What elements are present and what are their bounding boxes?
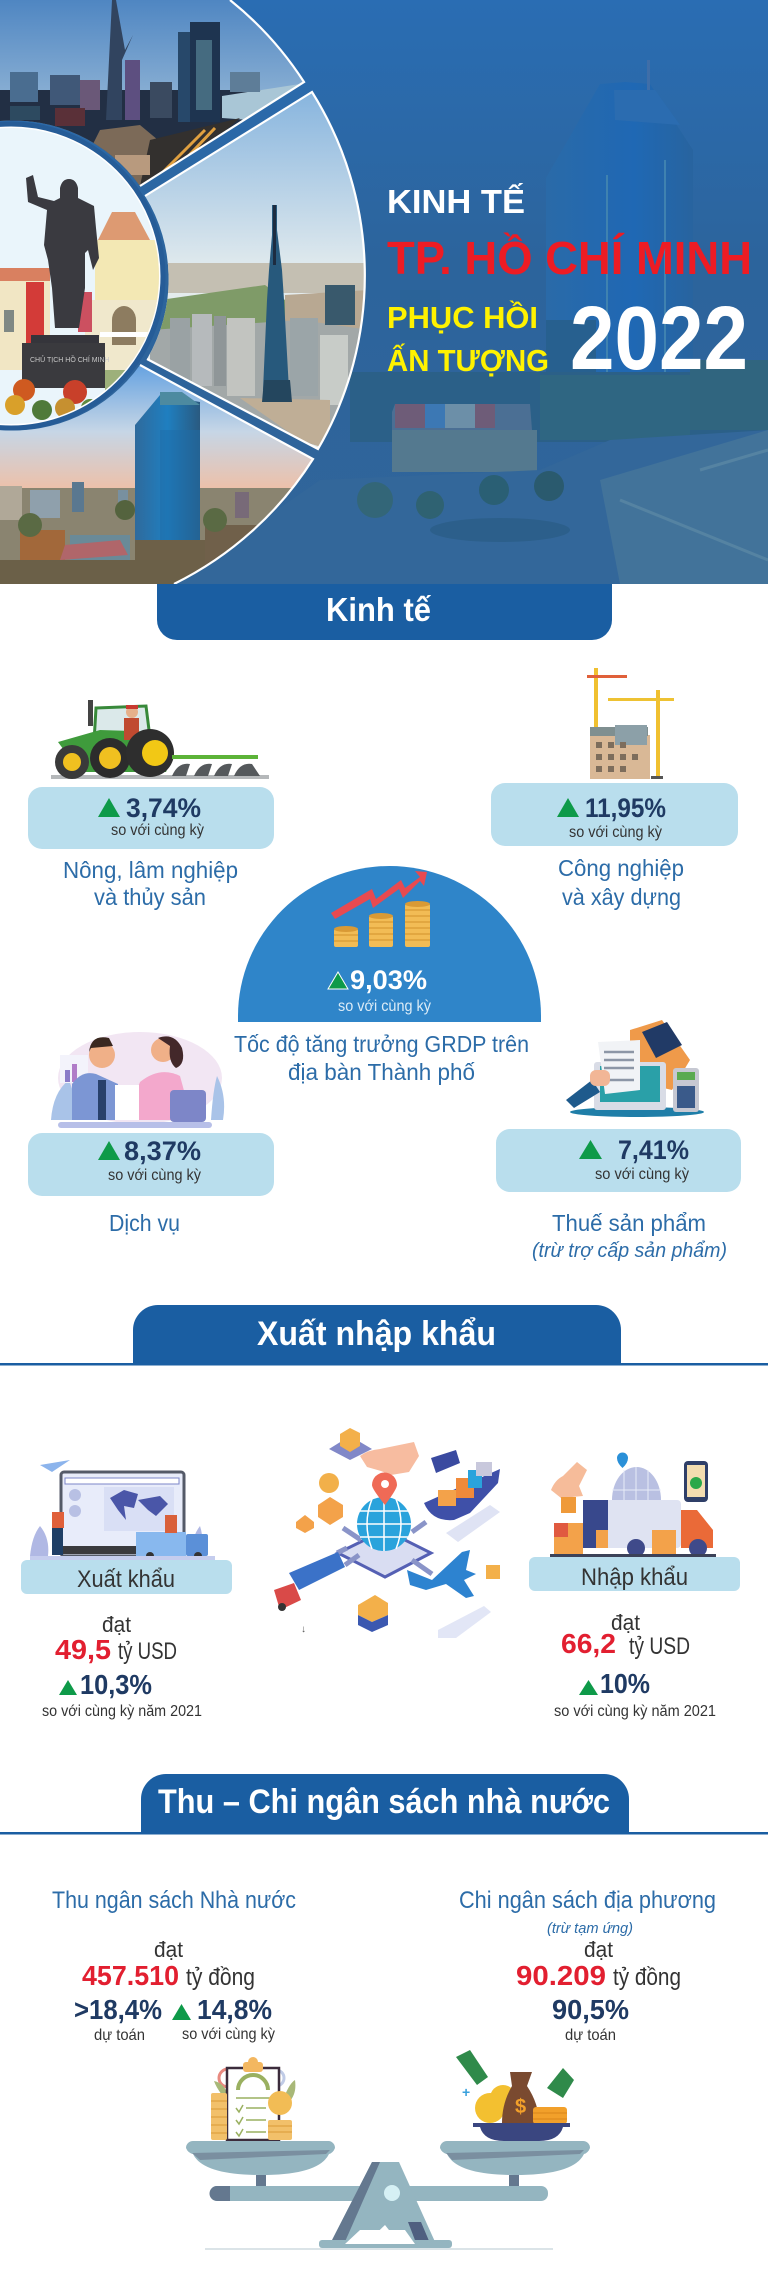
label: GRDP: Tốc độ tăng trưởng GRDP trên <box>234 1031 529 1057</box>
photo sector: Landmark 81 <box>140 90 370 460</box>
heading: Thu Chi ngân sách: Thu – Chi ngân sách nhà nước <box>158 1783 610 1821</box>
flowers <box>13 379 35 401</box>
icon: tax <box>566 1020 704 1117</box>
hero banner <box>0 0 768 584</box>
panel: construction: 11,95% <box>585 793 666 823</box>
icon: money bag bowl <box>456 2050 574 2141</box>
ghost tower background <box>170 60 768 584</box>
panel: services: so với cùng kỳ <box>108 1167 201 1184</box>
heading: Thu Chi ngân sách <box>0 1774 768 1834</box>
panel: agriculture: 3,74% <box>126 793 201 823</box>
panel: agriculture <box>28 787 274 849</box>
statue figure <box>26 175 99 328</box>
stats: export: tỷ USD <box>118 1638 177 1665</box>
label: tax <box>532 1210 727 1262</box>
label: construction: và xây dựng <box>562 884 681 910</box>
label: GRDP <box>234 1031 529 1085</box>
panel: tax: so với cùng kỳ <box>595 1166 689 1183</box>
label: agriculture: và thủy sản <box>94 884 206 910</box>
stats: revenue <box>52 1887 296 2044</box>
stats: expenditure: dự toán <box>565 2027 616 2044</box>
stats: expenditure: (trừ tạm ứng) <box>547 1920 633 1937</box>
label: GRDP: địa bàn Thành phố <box>288 1059 475 1085</box>
icon: tractor <box>51 700 269 779</box>
photo sector: tower at sunset <box>0 360 320 584</box>
label: construction <box>558 855 684 910</box>
stats: expenditure: 90,5% <box>552 1994 629 2025</box>
panel: construction: so với cùng kỳ <box>569 824 662 841</box>
label: agriculture <box>63 857 238 910</box>
stats: revenue: 457.510 <box>82 1960 179 1991</box>
panel: export <box>21 1560 232 1594</box>
stats: revenue: dự toán <box>94 2027 145 2044</box>
icon: construction <box>587 668 674 779</box>
panel: services: 8,37% <box>124 1136 201 1166</box>
panel: import <box>529 1557 740 1591</box>
photo sector: night skyline <box>0 0 302 186</box>
label: tax: (trừ trợ cấp sản phẩm) <box>532 1240 727 1262</box>
stats: expenditure: 90.209 <box>516 1960 606 1991</box>
stats: revenue: >18,4% <box>74 1994 162 2025</box>
icon: money bag bowl: + <box>462 2084 470 2100</box>
stats: export: so với cùng kỳ năm 2021 <box>42 1703 202 1720</box>
icon: coin stacks with arrow <box>331 871 430 947</box>
heading: Xuất nhập khẩu <box>0 1305 768 1366</box>
icon: import truck <box>550 1452 716 1557</box>
label: services: Dịch vụ <box>109 1210 180 1236</box>
heading: Kinh tế: Kinh tế <box>326 591 432 628</box>
panel: GRDP dome <box>238 866 541 1022</box>
label: agriculture: Nông, lâm nghiệp <box>63 857 238 883</box>
panel: services <box>28 1133 274 1196</box>
icon: money bag bowl: $ <box>515 2096 526 2118</box>
hero title: KINH TẾ <box>387 183 525 220</box>
hero title: ẤN TƯỢNG <box>387 343 549 378</box>
icon: global logistics: ↓ <box>301 1624 306 1635</box>
stats: export <box>42 1612 202 1720</box>
stats: import: 10% <box>600 1668 650 1699</box>
label: construction: Công nghiệp <box>558 855 684 881</box>
stats: revenue: tỷ đồng <box>186 1964 255 1991</box>
panel: tax <box>496 1129 741 1192</box>
stats: import <box>554 1610 716 1720</box>
photo: statue circle <box>0 120 170 430</box>
stats: revenue: Thu ngân sách Nhà nước <box>52 1887 296 1914</box>
panel: export: Xuất khẩu <box>77 1566 175 1593</box>
label: tax: Thuế sản phẩm <box>552 1210 706 1236</box>
icon: service people <box>51 1032 224 1128</box>
stats: expenditure: đạt <box>584 1937 613 1962</box>
stats: expenditure: tỷ đồng <box>613 1964 681 1991</box>
icon: export laptop <box>30 1460 215 1560</box>
hero title: 2022 <box>570 289 748 389</box>
stats: export: 49,5 <box>55 1634 111 1665</box>
stats: import: tỷ USD <box>629 1633 690 1660</box>
hero title: PHỤC HỒI <box>387 299 538 335</box>
photo: statue circle: CHỦ TỊCH HỒ CHÍ MINH <box>30 354 110 364</box>
stats: revenue: đạt <box>154 1937 183 1962</box>
icon: balance scale <box>186 2141 590 2250</box>
panel: tax: 7,41% <box>618 1135 689 1165</box>
stats: import: so với cùng kỳ năm 2021 <box>554 1703 716 1720</box>
icon: clipboard with coins <box>211 2057 295 2140</box>
icon: global logistics <box>274 1428 500 1638</box>
stats: import: đạt <box>611 1610 640 1635</box>
stats: export: đạt <box>102 1612 131 1637</box>
stats: export: 10,3% <box>80 1669 152 1700</box>
stats: expenditure <box>459 1887 716 2044</box>
stats: expenditure: Chi ngân sách địa phương <box>459 1887 716 1914</box>
hero title: TP. HỒ CHÍ MINH <box>387 232 752 284</box>
panel: GRDP dome: 9,03% <box>350 965 427 995</box>
sector outlines <box>140 0 365 584</box>
panel: construction <box>491 783 738 846</box>
panel: agriculture: so với cùng kỳ <box>111 822 204 839</box>
hero title <box>387 183 752 389</box>
stats: import: 66,2 <box>561 1628 616 1659</box>
panel: import: Nhập khẩu <box>581 1564 688 1591</box>
heading: Kinh tế <box>157 584 612 640</box>
heading: Xuất nhập khẩu: Xuất nhập khẩu <box>257 1315 496 1353</box>
panel: GRDP dome: so với cùng kỳ <box>338 998 431 1015</box>
stats: revenue: 14,8% <box>197 1994 272 2025</box>
stats: revenue: so với cùng kỳ <box>182 2026 275 2043</box>
